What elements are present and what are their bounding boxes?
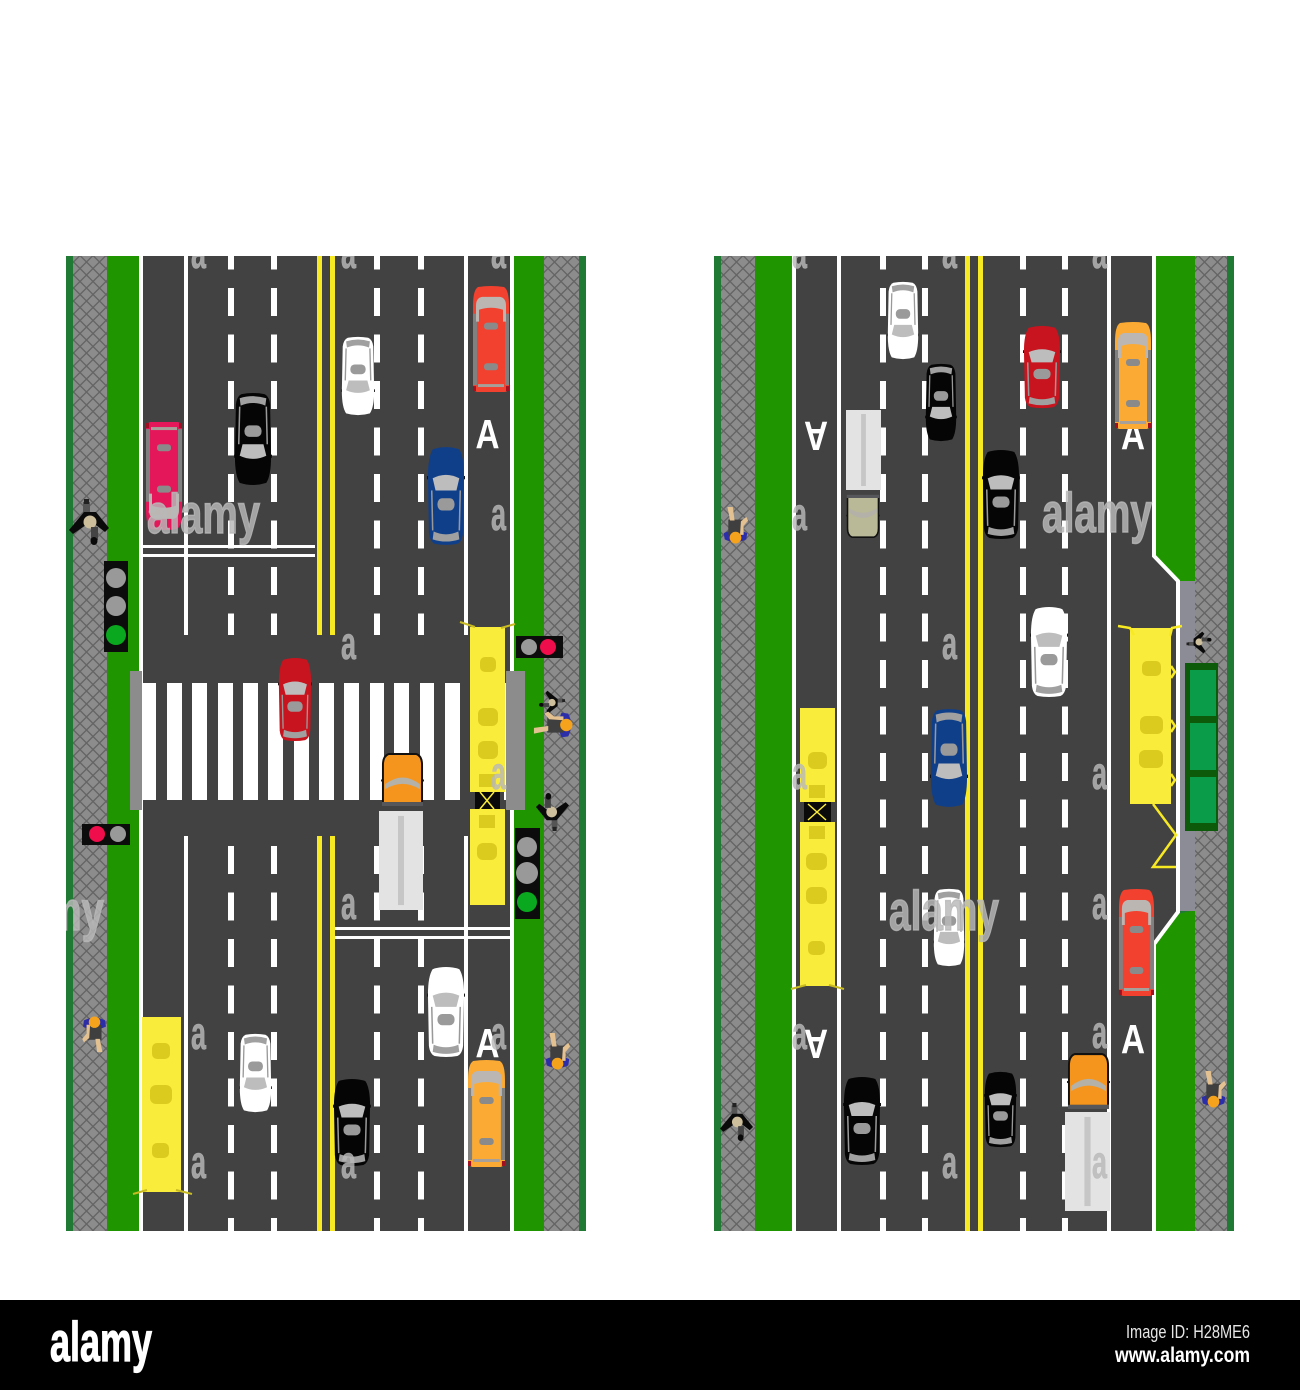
road letters A (804, 412, 1145, 1067)
watermarks: alamy (147, 482, 260, 545)
articulated yellow bus on the left lane (791, 708, 844, 989)
green bus shelter (1185, 663, 1218, 831)
traffic light horizontal right (516, 636, 563, 658)
small watermark letters: a (942, 617, 957, 669)
white car top (885, 282, 921, 359)
small watermark letters: a (1092, 1136, 1107, 1188)
watermarks (46, 226, 1152, 1188)
pedestrian lower right (546, 1033, 570, 1069)
left road verges and sidewalks (66, 256, 586, 1231)
footer logo: alamy (50, 1310, 152, 1373)
small watermark letters: a (191, 226, 206, 278)
small watermark letters: a (341, 877, 356, 929)
truck with orange cab right (1065, 1053, 1112, 1211)
yellow bus lower left (133, 1017, 192, 1194)
black car (231, 393, 275, 485)
pedestrian in black left (69, 499, 109, 545)
small watermark letters: a (191, 1007, 206, 1059)
footer bar (0, 1300, 1300, 1390)
small watermark letters (191, 226, 1107, 1188)
black car lower centre (330, 1079, 374, 1166)
small watermark letters: a (792, 747, 807, 799)
small watermark letters: a (1092, 747, 1107, 799)
red car top (1020, 326, 1064, 408)
truck with orange cab (379, 753, 426, 910)
small watermark letters: a (491, 226, 506, 278)
right road verges and sidewalks (714, 256, 1234, 1231)
pedestrian walking on right sidewalk (536, 793, 569, 831)
blue car (424, 447, 468, 545)
small watermark letters: a (341, 617, 356, 669)
traffic light vertical right (515, 828, 540, 919)
black car top (923, 364, 959, 441)
small watermark letters: a (191, 1136, 206, 1188)
road letter A: A (476, 411, 500, 457)
pedestrian on right sidewalk bottom (1202, 1071, 1226, 1107)
pedestrian on left sidewalk top (724, 507, 748, 543)
right road lane markings (837, 256, 1111, 1231)
footer image id: Image ID: H28ME6 (1126, 1322, 1250, 1342)
black car lower left (840, 1077, 884, 1165)
panel: right road plan with bus bay (714, 256, 1234, 1231)
white car middle (1027, 607, 1071, 697)
left road lane markings (143, 256, 510, 1231)
black car lower right (982, 1072, 1019, 1147)
watermarks: my (46, 879, 104, 942)
truck with olive cab (844, 410, 882, 538)
pink minibus (146, 422, 182, 530)
pedestrian near shelter (1186, 632, 1212, 653)
red car on crossing (275, 658, 315, 741)
road letters A: A (804, 1021, 828, 1067)
small watermark letters: a (341, 1136, 356, 1188)
small watermark letters: a (1092, 1006, 1107, 1058)
road letter A lower: A (476, 1020, 500, 1066)
white car (338, 337, 378, 415)
right road surface (792, 256, 1178, 1231)
white car lower right (424, 967, 468, 1057)
road letters A: A (804, 413, 828, 459)
small watermark letters: a (942, 226, 957, 278)
blue car middle (927, 709, 971, 807)
white car lower left (237, 1034, 274, 1112)
small watermark letters: a (491, 747, 506, 799)
small watermark letters: a (1092, 226, 1107, 278)
pedestrian crossing (130, 671, 525, 810)
black car middle (979, 450, 1023, 539)
pedestrian lower left (82, 1016, 106, 1052)
road letters A: A (1121, 412, 1145, 458)
red minibus (473, 286, 509, 392)
yellow bus in bay (1118, 626, 1182, 867)
panel: left road plan with pedestrian crossing (66, 256, 586, 1231)
small watermark letters: a (491, 1007, 506, 1059)
left road surface (139, 256, 514, 1231)
watermarks: alamy (889, 879, 999, 942)
small watermark letters: a (491, 488, 506, 540)
orange minibus (468, 1060, 505, 1167)
pedestrian on left sidewalk bottom (720, 1103, 753, 1141)
orange minibus right (1115, 322, 1151, 429)
articulated yellow bus (460, 622, 515, 905)
right green verge with bus bay cut-out (1154, 256, 1195, 1231)
pedestrian at crossing black (539, 691, 565, 713)
small watermark letters: a (942, 1136, 957, 1188)
footer website: www.alamy.com (1114, 1344, 1250, 1367)
watermarks: alamy (1042, 481, 1152, 544)
small watermark letters: a (1092, 877, 1107, 929)
small watermark letters: a (792, 1007, 807, 1059)
traffic light horizontal left (82, 824, 130, 845)
small watermark letters: a (341, 226, 356, 278)
red minibus at bay (1119, 889, 1154, 996)
small watermark letters: a (792, 226, 807, 278)
road letters A: A (1121, 1016, 1145, 1062)
small watermark letters: a (792, 488, 807, 540)
traffic light vertical left (104, 561, 128, 652)
pedestrian at crossing blue (534, 712, 573, 737)
white car lower (931, 889, 967, 966)
